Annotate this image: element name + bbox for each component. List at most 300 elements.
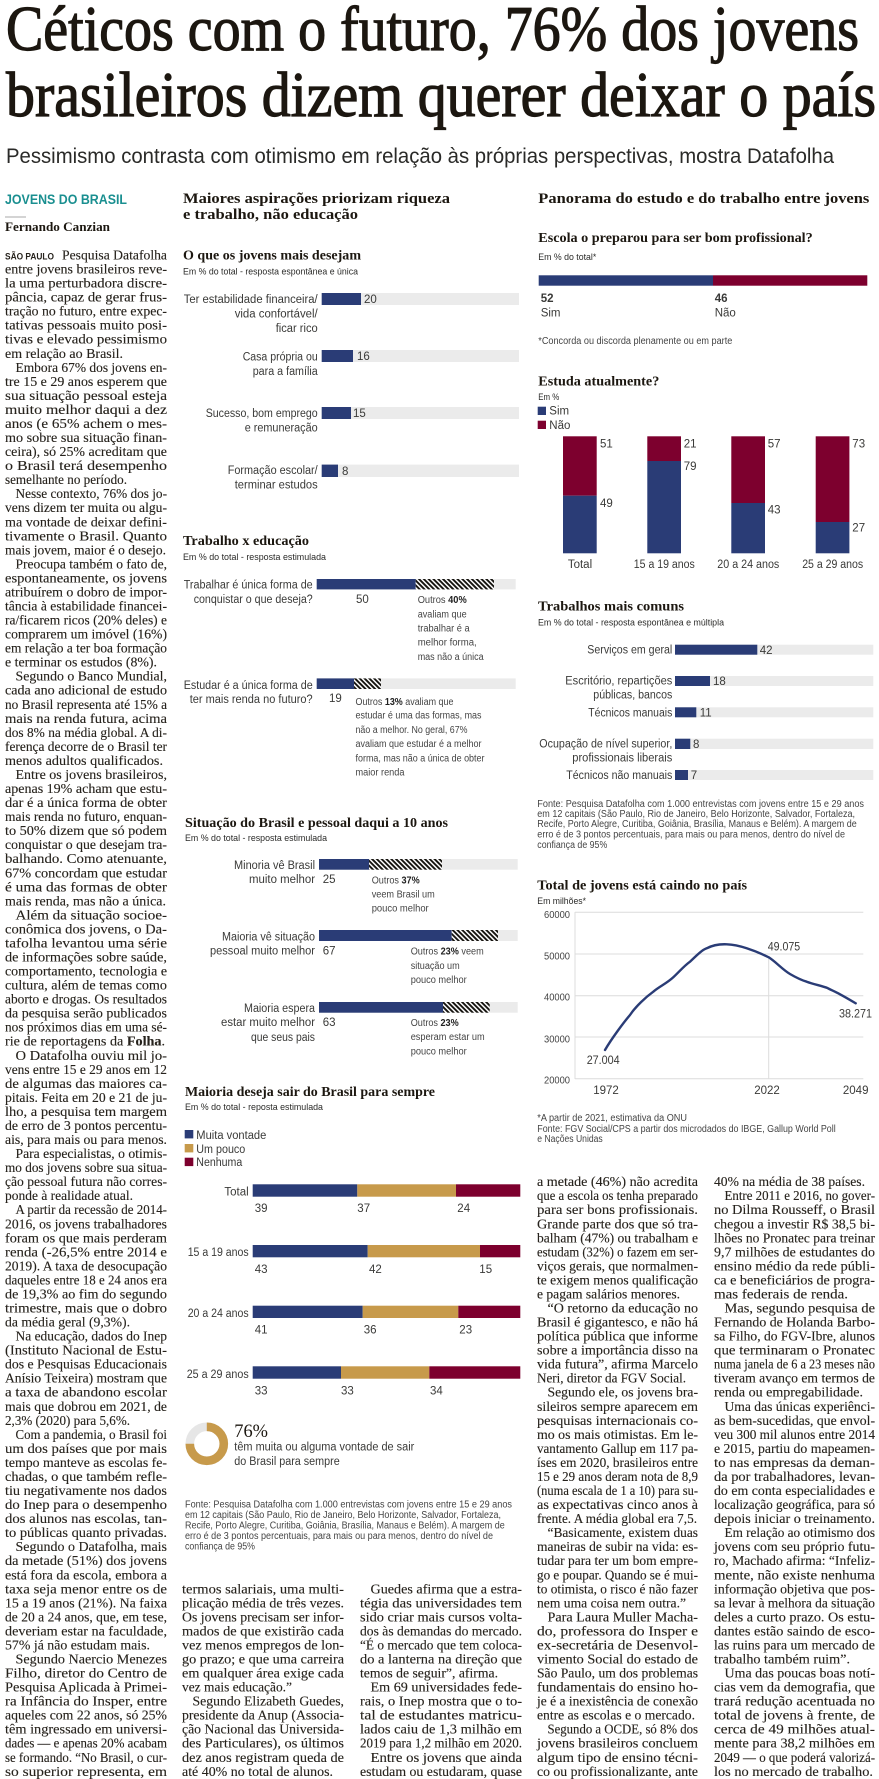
- stacked bar chart: Maioria deseja sair do Brasil: Maioria deseja sair do Brasil para sempre: [185, 1084, 435, 1099]
- bar chart: Trabalhos mais comuns: 18: [713, 676, 726, 688]
- article text column 1: em relação ao Brasil.: [5, 347, 123, 362]
- article text column 5: cias vem da demografia, que: [714, 1681, 875, 1696]
- article text column 1: sua situação pessoal esteja: [5, 389, 168, 404]
- article text column 4: to otimista, o risco é não fazer: [537, 1582, 698, 1597]
- article text column 4: (numa escala de 1 a 10) para su-: [537, 1484, 698, 1499]
- subtitle: Pessimismo contrasta com otimismo em relação às próprias perspectivas, mostra Datafolha: [6, 145, 834, 168]
- article text column 5: dantes estão saindo de esco-: [714, 1624, 875, 1639]
- line chart: Total de jovens está caindo: 1972: [593, 1085, 619, 1097]
- article text column 1: deveriam estar na faculdade,: [5, 1624, 167, 1639]
- bar chart: Trabalhos mais comuns: 8: [693, 739, 699, 751]
- article text column 1: dades — e apenas 20% acabam: [5, 1737, 167, 1752]
- article text column 5: Mas, segundo pesquisa de: [724, 1302, 875, 1316]
- article text column 2: vez menos empregos de lon-: [182, 1638, 344, 1654]
- bar chart: Trabalho x educação: Em % do total - resposta estimulada: [183, 552, 327, 563]
- article text column 1: ma vontade de deixar defini-: [5, 515, 167, 530]
- bar chart: O que os jovens mais desejam: O que os jovens mais desejam: [183, 248, 362, 262]
- article text column 5: ensino médio da rede públi-: [714, 1259, 875, 1274]
- article text column 1: A partir da recessão de 2014-: [16, 1203, 167, 1218]
- article text column 4: sobre a importância disso na: [537, 1344, 699, 1359]
- article text column 1: aborto e drogas. Os resultados: [5, 993, 167, 1008]
- line chart: Total de jovens está caindo: 40000: [544, 993, 570, 1004]
- article text column 1: anos (e 65% achem o mes-: [5, 417, 167, 432]
- bar chart: Escola o preparou: Sim: [541, 307, 561, 319]
- heading: Maiores aspirações: e trabalho, não educação: [183, 207, 358, 223]
- stacked bar chart: Maioria deseja sair do Brasil: 34: [430, 1385, 443, 1397]
- callout: 76% donut: 76%: [234, 1421, 268, 1442]
- article text column 3: rais, o Inep mostra que o to-: [360, 1695, 522, 1710]
- bar chart: Escola o preparou: *Concorda ou discorda plenamente ou em parte: [538, 336, 733, 347]
- source note: left chart: Recife, Porto Alegre, Curitiba, Goiânia, Brasília, Manaus e Belém). A margem de: [185, 1520, 505, 1532]
- article text column 4: Neri, diretor da FGV Social.: [537, 1372, 686, 1387]
- source note: left chart: erro é de 3 pontos percentuais, para mais ou para menos, dentro do nível de: [185, 1531, 493, 1542]
- article text column 5: cerca de 49 milhões atual-: [714, 1723, 875, 1738]
- article text column 5: total de jovens à frente, de: [714, 1709, 875, 1724]
- article text column 4: Segundo ele, os jovens bra-: [548, 1386, 698, 1401]
- article text column 1: tração no futuro, entre expec-: [5, 305, 167, 320]
- bar chart: Trabalho x educação: Estudar é a única forma de: [184, 680, 313, 692]
- bar chart: Trabalho x educação: avaliam que: [418, 610, 467, 620]
- article text column 1: la uma perturbadora discre-: [5, 277, 167, 292]
- bar chart: Trabalho x educação: Trabalho x educação: [183, 533, 309, 548]
- article text column 1: (Instituto Nacional de Estu-: [5, 1344, 167, 1359]
- article text column 5: do em conta especialidades e: [714, 1484, 875, 1499]
- article text column 5: 9,7 milhões de estudantes do: [714, 1245, 875, 1260]
- article text column 1: conômica dos jovens, o Da-: [5, 922, 167, 937]
- bar chart: Situação do Brasil e pessoal: Situação do Brasil e pessoal daqui a 10 anos: [185, 815, 448, 830]
- line chart: Total de jovens está caindo: [537, 878, 872, 1097]
- article text column 1: mais jovem, maior é o desejo.: [5, 543, 166, 558]
- legend: Muita vontade: [196, 1130, 266, 1142]
- article text column 1: Para especialistas, o otimis-: [16, 1147, 167, 1162]
- article text column 1: Segundo Naercio Menezes: [16, 1652, 167, 1668]
- article text column 1: Com a pandemia, o Brasil foi: [16, 1428, 167, 1443]
- article text column 3: sido criar mais cursos volta-: [360, 1610, 522, 1625]
- legend: Sim: [549, 406, 569, 418]
- bar chart: Trabalho x educação: maior renda: [356, 768, 405, 778]
- article text column 3: temos de seguir”, afirma.: [360, 1666, 498, 1682]
- article text column 5: renda ou empregabilidade.: [714, 1386, 863, 1401]
- callout: 76% donut: do Brasil para sempre: [234, 1456, 340, 1468]
- source note: right chart: erro é de 3 pontos percentuais, para mais ou para menos, dentro do nível de: [537, 830, 845, 840]
- bar chart: Situação do Brasil e pessoal: veem Brasil um: [372, 890, 435, 900]
- bar chart: Escola o preparou: [538, 230, 867, 347]
- bar chart: O que os jovens mais desejam: Casa própria ou: [243, 352, 318, 364]
- bar chart: Trabalho x educação: Outros 13% avaliam que: [356, 697, 454, 708]
- article text column 1: ção pessoal futura não corres-: [5, 1175, 167, 1190]
- article text column 4: do, professora do Insper e: [537, 1624, 698, 1639]
- article text column 5: ro, Machado afirma: “Infeliz-: [714, 1554, 875, 1569]
- stacked column chart: Estuda atualmente: 27: [852, 522, 865, 534]
- article text column 1: pitais. Feita em 20 e 21 de ju-: [5, 1091, 167, 1106]
- stacked bar chart: Maioria deseja sair do Brasil: 33: [341, 1385, 354, 1397]
- article text column 5: jovens com seu próprio futu-: [713, 1540, 875, 1555]
- article text column 1: entre jovens brasileiros reve-: [5, 262, 167, 278]
- bar chart: Trabalhos mais comuns: Escritório, repartições: [565, 676, 673, 688]
- stacked bar chart: Maioria deseja sair do Brasil: 15: [479, 1264, 492, 1276]
- bar chart: Trabalho x educação: melhor forma,: [418, 638, 477, 648]
- article text column 1: tativas pessoais muito posi-: [5, 319, 167, 334]
- article text column 4: e pagam salários menores.: [537, 1288, 680, 1302]
- stacked bar chart: Maioria deseja sair do Brasil: 33: [255, 1385, 267, 1397]
- article text column 2: [182, 1582, 345, 1779]
- article text column 4: Brasil é gigantesco, e não há: [537, 1316, 699, 1330]
- article text column 1: mais renda no futuro, enquan-: [5, 810, 167, 825]
- article text column 1: de erro de 3 pontos percentu-: [5, 1119, 167, 1134]
- article text column 1: Segundo o Banco Mundial,: [16, 670, 167, 685]
- article text column 1: SÃO PAULO: [5, 252, 54, 262]
- article text column 4: algum tipo de ensino técni-: [537, 1751, 698, 1766]
- article text column 1: tivas e elevado pessimismo: [5, 333, 167, 348]
- article text column 4: São Paulo, um dos problemas: [537, 1666, 698, 1682]
- line chart: Total de jovens está caindo: 2049: [843, 1085, 868, 1097]
- stacked bar chart: Maioria deseja sair do Brasil: 36: [364, 1325, 376, 1337]
- bar chart: Situação do Brasil e pessoal: pouco melhor: [411, 975, 467, 986]
- article text column 1: comprarem um imóvel (16%): [5, 628, 167, 643]
- source note: left chart: confiança de 95%: [185, 1542, 255, 1552]
- article text column 4: política pública que informe: [537, 1330, 698, 1345]
- article text column 2: mados de que existirão cada: [182, 1624, 345, 1639]
- line chart: Total de jovens está caindo: 38.271: [839, 1008, 872, 1020]
- article text column 3: Em 69 universidades fede-: [370, 1681, 522, 1696]
- article text column 1: 15 a 19 anos (21%). Na faixa: [5, 1596, 168, 1611]
- bar chart: Trabalhos mais comuns: 11: [700, 708, 712, 720]
- bar chart: Trabalhos mais comuns: Serviços em geral: [587, 645, 672, 657]
- heading: Maiores aspirações: [183, 191, 451, 223]
- article text column 1: Além da situação socioe-: [16, 908, 167, 923]
- article text column 1: Entre os jovens brasileiros,: [16, 768, 167, 783]
- source note: left chart: em 12 capitais (São Paulo, Rio de Janeiro, Belo Horizonte, Salvador, Fortaleza,: [185, 1510, 501, 1521]
- article text column 1: tempo manteve as escolas fe-: [5, 1456, 167, 1471]
- bar chart: Escola o preparou: 46: [715, 293, 727, 305]
- article text column 5: no Dilma Rousseff, o Brasil: [714, 1203, 875, 1218]
- article text column 2: Os jovens precisam ser infor-: [182, 1610, 344, 1625]
- bar chart: Trabalho x educação: Outros 40%: [418, 595, 467, 606]
- stacked column chart: Estuda atualmente: 25 a 29 anos: [802, 559, 863, 571]
- article text column 1: Pesquisa Aplicada à Primei-: [5, 1681, 167, 1696]
- bar chart: Situação do Brasil e pessoal: que seus pais: [251, 1032, 315, 1044]
- article text column 3: tégia das universidades tem: [360, 1596, 522, 1611]
- article text column 4: nem uma coisa nem outra.”: [537, 1596, 686, 1611]
- article text column 1: mais na renda futura, acima: [5, 712, 168, 727]
- article text column 4: tudar para ter um bom empre-: [537, 1554, 698, 1569]
- article text column 2: go prazo; e que uma carreira: [182, 1652, 345, 1668]
- bar chart: O que os jovens mais desejam: Ter estabilidade financeira/: [184, 294, 318, 306]
- article text column 1: apenas 19% acham que estu-: [5, 782, 167, 797]
- article text column 3: do a lanterna na direção que: [360, 1652, 522, 1668]
- article text column 1: aqueles com 22 anos, só 25%: [5, 1709, 167, 1724]
- article text column 5: que terminaram o Pronatec: [714, 1344, 875, 1359]
- bar chart: Trabalho x educação: 50: [356, 594, 369, 606]
- article text column 1: comportamento, tecnologia e: [5, 964, 167, 980]
- bar chart: Trabalhos mais comuns: 7: [691, 770, 697, 782]
- legend: Nenhuma: [196, 1157, 243, 1169]
- article text column 5: ca e beneficiários de progra-: [714, 1273, 875, 1288]
- bar chart: Situação do Brasil e pessoal: situação um: [411, 961, 460, 972]
- bar chart: Situação do Brasil e pessoal: [185, 815, 518, 1058]
- article text column 1: o Brasil terá desempenho: [5, 459, 167, 474]
- article text column 5: da por trabalhadores, levan-: [714, 1470, 875, 1485]
- article text column 1: 2019). A taxa de desocupação: [5, 1259, 167, 1274]
- article text column 5: veu 300 mil alunos entre 2014: [714, 1428, 875, 1443]
- bar chart: Situação do Brasil e pessoal: Outros 23%: [411, 1018, 459, 1029]
- article text column 1: Nesse contexto, 76% dos jo-: [16, 487, 167, 502]
- article text column 1: têm ingressado em universi-: [5, 1723, 167, 1738]
- article text column 1: tafolha levantou uma série: [5, 936, 167, 952]
- bar chart: Trabalho x educação: ter mais renda no futuro?: [190, 694, 313, 706]
- line chart: Total de jovens está caindo: 2022: [754, 1085, 780, 1097]
- article text column 1: vens entre 15 e 29 anos em 12: [5, 1063, 167, 1078]
- bar chart: Trabalho x educação: avaliam que estudar é a melhor: [356, 739, 482, 750]
- article text column 3: “É o mercado que tem coloca-: [360, 1636, 522, 1654]
- bar chart: O que os jovens mais desejam: 16: [357, 351, 370, 363]
- bar chart: Escola o preparou: 52: [541, 293, 553, 305]
- article text column 1: semelhante no período.: [5, 473, 127, 488]
- stacked bar chart: Maioria deseja sair do Brasil: Total: [224, 1187, 249, 1199]
- bar chart: O que os jovens mais desejam: Formação escolar/: [228, 465, 318, 477]
- article text column 2: plicação média de três vezes.: [182, 1596, 344, 1611]
- bar chart: Situação do Brasil e pessoal: muito melhor: [249, 874, 315, 886]
- bar chart: O que os jovens mais desejam: e remuneração: [245, 423, 318, 435]
- line chart: Total de jovens está caindo: 20000: [544, 1075, 570, 1086]
- article text column 4: te exigem menos qualificação: [537, 1273, 698, 1288]
- bar chart: Situação do Brasil e pessoal: 67: [323, 946, 335, 958]
- article text column 1: da média geral (9,3%).: [5, 1316, 130, 1330]
- article text column 1: Filho, diretor do Centro de: [5, 1666, 167, 1682]
- article text column 5: chegou a investir R$ 38,5 bi-: [714, 1217, 875, 1232]
- bar chart: Situação do Brasil e pessoal: esperam estar um: [411, 1032, 485, 1043]
- stacked bar chart: Maioria deseja sair do Brasil: 23: [459, 1325, 472, 1337]
- bar chart: Trabalhos mais comuns: Técnicos manuais: [588, 707, 673, 719]
- article text column 5: e 2015, partiu do mapeamen-: [714, 1442, 875, 1457]
- article text column 1: de 20 a 24 anos, que, em tese,: [5, 1610, 167, 1625]
- source note: left chart: [185, 1500, 512, 1552]
- article text column 1: 2016, os jovens trabalhadores: [5, 1217, 167, 1232]
- article text column 4: je é a inexistência de conexão: [536, 1695, 698, 1710]
- article text column 1: Segundo o Datafolha, mais: [16, 1540, 167, 1555]
- article text column 1: e terminar os estudos (8%).: [5, 656, 157, 671]
- article text column 1: da pesquisa serão publicados: [5, 1007, 167, 1022]
- article text column 3: lados caiu de 1,3 milhão em: [360, 1723, 522, 1738]
- article text column 1: 67% concordam que estudar: [5, 866, 167, 881]
- article text column 1: cada ano adicional de estudo: [5, 684, 167, 699]
- bar chart: Trabalho x educação: não a melhor. No geral, 67%: [356, 725, 468, 736]
- bar chart: Trabalhos mais comuns: Trabalhos mais comuns: [538, 599, 684, 614]
- stacked bar chart: Maioria deseja sair do Brasil: 42: [369, 1264, 382, 1276]
- bar chart: Trabalhos mais comuns: 42: [760, 645, 772, 657]
- stacked column chart: Estuda atualmente: [538, 373, 865, 571]
- stacked column chart: Estuda atualmente: 20 a 24 anos: [717, 559, 780, 571]
- article text column 4: [536, 1175, 699, 1779]
- stacked column chart: Estuda atualmente: Total: [568, 559, 592, 571]
- stacked column chart: Estuda atualmente: 49: [600, 498, 613, 510]
- bar chart: Situação do Brasil e pessoal: 25: [323, 874, 335, 886]
- article text column 1: Preocupa também o fato de,: [16, 557, 167, 572]
- stacked column chart: Estuda atualmente: 21: [684, 438, 696, 450]
- article text column 1: Embora 67% dos jovens en-: [16, 361, 167, 376]
- line chart: Total de jovens está caindo: Em milhões*: [537, 896, 586, 907]
- bar chart: Situação do Brasil e pessoal: pouco melhor: [411, 1046, 467, 1058]
- article text column 1: no Brasil representa até 15% a: [5, 698, 168, 713]
- article text column 4: Segundo a OCDE, só 8% dos: [548, 1723, 698, 1738]
- stacked bar chart: Maioria deseja sair do Brasil: 24: [457, 1203, 471, 1215]
- legend: [538, 406, 570, 432]
- line chart: Total de jovens está caindo: Total de jovens está caindo no país: [537, 878, 747, 893]
- article text column 4: frente. A média global era 7,5.: [537, 1512, 697, 1527]
- article text column 4: Grande parte dos que só tra-: [537, 1217, 698, 1232]
- article text column 1: de 19,3% ao fim do segundo: [5, 1288, 167, 1302]
- article text column 1: nos próximos dias em uma sé-: [5, 1021, 167, 1036]
- bar chart: Trabalho x educação: estudar é uma das formas, mas: [356, 710, 482, 722]
- article text column 1: espontaneamente, os jovens: [5, 571, 167, 586]
- article text column 1: taxa seja menor entre os de: [5, 1582, 167, 1597]
- source note: line chart: e Nações Unidas: [537, 1134, 603, 1145]
- article text column 5: Fernando de Holanda Barbo-: [714, 1316, 875, 1330]
- article text column 2: des Particulares), os últimos: [182, 1737, 344, 1752]
- stacked column chart: Estuda atualmente: 57: [768, 438, 780, 450]
- article text column 5: [713, 1175, 876, 1779]
- source note: line chart: Fonte: FGV Social/CPS a partir dos microdados do IBGE, Gallup World Poll: [537, 1124, 836, 1135]
- article text column 4: vimento Social do estado de: [537, 1652, 698, 1668]
- article text column 4: balham (47%) ou trabalham e: [537, 1231, 698, 1246]
- line chart: Total de jovens está caindo: 50000: [544, 952, 570, 962]
- article text column 5: lhões no Pronatec para treinar: [714, 1231, 875, 1246]
- bar chart: Trabalhos mais comuns: [538, 599, 873, 782]
- stacked column chart: Estuda atualmente: 79: [684, 461, 696, 473]
- bar chart: Trabalho x educação: conquistar o que deseja?: [194, 594, 313, 606]
- article text column 1: tivamente o Brasil. Quanto: [5, 529, 167, 544]
- article text column 1: pância, capaz de gerar frus-: [5, 291, 167, 306]
- article text column 1: dos 8% na média global. A di-: [5, 726, 167, 741]
- article text column 1: Na educação, dados do Inep: [16, 1330, 167, 1345]
- bar chart: Trabalhos mais comuns: profissionais liberais: [572, 753, 673, 765]
- article text column 5: tiveram avanço em termos de: [714, 1372, 875, 1387]
- heading: Maiores aspirações: Maiores aspirações priorizam riqueza: [183, 191, 451, 207]
- article text column 1: a taxa de abandono escolar: [5, 1386, 167, 1401]
- article text column 3: 2019 para 1,2 milhão em 2020.: [360, 1737, 522, 1752]
- article text column 1: dos e Pesquisas Educacionais: [5, 1358, 167, 1373]
- article text column 5: deles a curto prazo. Os estu-: [714, 1610, 875, 1625]
- article text column 4: vida futura”, afirma Marcelo: [537, 1358, 698, 1373]
- article text column 2: dez anos registram queda de: [182, 1751, 344, 1766]
- article text column 1: mo dos jovens sobre sua situa-: [5, 1161, 167, 1176]
- bar chart: Situação do Brasil e pessoal: Maioria vê situação: [222, 932, 315, 944]
- article text column 4: 15 e 29 anos deram nota de 8,9: [537, 1470, 698, 1485]
- article text column 4: go e poupar. Quando se é mui-: [537, 1568, 698, 1583]
- article text column 1: balhando. Como atenuante,: [5, 852, 167, 867]
- article text column 1: é uma das formas de obter: [5, 880, 167, 895]
- article text column 1: mais renda, mas não a única.: [5, 894, 166, 909]
- bar chart: Trabalhos mais comuns: Em % do total - resposta espontânea e múltipla: [538, 618, 725, 628]
- bar chart: Trabalhos mais comuns: Ocupação de nível superior,: [539, 739, 672, 751]
- stacked column chart: Estuda atualmente: 43: [768, 505, 780, 517]
- article text column 1: ferença decorre de o Brasil ter: [5, 740, 167, 755]
- bar chart: Trabalho x educação: forma, mas não a única de obter: [356, 754, 485, 764]
- article text column 4: estudam (32%) o fazem em ser-: [537, 1245, 698, 1260]
- bar chart: Trabalho x educação: mas não a única: [418, 652, 484, 663]
- article text column 3: tal de estudantes matricu-: [360, 1709, 522, 1724]
- stacked bar chart: Maioria deseja sair do Brasil: 25 a 29 anos: [187, 1369, 249, 1381]
- article text column 1: foram os que mais perderam: [5, 1231, 167, 1246]
- article text column 4: entre as escolas e o mercado.: [537, 1709, 695, 1724]
- bar chart: Escola o preparou: Em % do total*: [538, 252, 597, 263]
- article text column 1: menos adultos qualificados.: [5, 754, 163, 769]
- article text column 1: tre 15 e 29 anos esperem que: [5, 375, 167, 390]
- article text column 1: Anísio Teixeira) mostram que: [5, 1372, 167, 1387]
- article text column 1: em relação a ter boa formação: [5, 642, 167, 657]
- bar chart: Trabalho x educação: [183, 533, 516, 778]
- bar chart: O que os jovens mais desejam: Em % do total - resposta espontânea e única: [183, 266, 359, 278]
- bar chart: O que os jovens mais desejam: para a família: [253, 366, 318, 378]
- article text column 1: muito melhor daqui a dez: [5, 403, 167, 418]
- article text column 1: cultura, além de temas como: [5, 979, 167, 994]
- article text column 3: Entre os jovens que ainda: [370, 1751, 523, 1766]
- stacked column chart: Estuda atualmente: Estuda atualmente?: [538, 373, 659, 388]
- legend: Não: [549, 420, 570, 432]
- article text column 5: depois iniciar o treinamento.: [714, 1512, 875, 1527]
- article text column 5: 40% na média de 38 países.: [714, 1175, 865, 1190]
- stacked bar chart: Maioria deseja sair do Brasil: 43: [255, 1264, 267, 1276]
- source note: line chart: *A partir de 2021, estimativa da ONU: [537, 1113, 687, 1124]
- article text column 1: do Inep para o desempenho: [5, 1498, 167, 1513]
- article text column 5: las ruins para um mercado de: [714, 1638, 875, 1654]
- article text column 1: tância à estabilidade financei-: [5, 600, 167, 614]
- article text column 5: trará redução acentuada no: [714, 1695, 875, 1710]
- article text column 1: to 50% dizem que só podem: [5, 824, 167, 839]
- article text column 4: a metade (46%) não acredita: [537, 1175, 699, 1190]
- callout: 76% donut: [190, 1421, 414, 1468]
- article text column 1: de algumas das maiores ca-: [5, 1077, 167, 1092]
- source note: left chart: Fonte: Pesquisa Datafolha com 1.000 entrevistas com jovens entre 15 e 29 anos: [185, 1500, 512, 1510]
- bar chart: Escola o preparou: Escola o preparou para ser bom profissional?: [538, 230, 813, 245]
- legend: Um pouco: [196, 1144, 245, 1156]
- bar chart: Situação do Brasil e pessoal: Em % do total - resposta estimulada: [185, 833, 328, 844]
- article text column 4: as expectativas cinco anos à: [537, 1498, 699, 1513]
- article text column 1: chadas, o que também refle-: [5, 1470, 167, 1485]
- bar chart: Situação do Brasil e pessoal: estar muito melhor: [221, 1017, 315, 1029]
- bar chart: Situação do Brasil e pessoal: Outros 37%: [372, 876, 420, 886]
- article text column 5: Uma das poucas boas notí-: [724, 1666, 875, 1682]
- article text column 1: da metade (51%) dos jovens: [5, 1554, 167, 1569]
- article text column 1: Pesquisa Datafolha: [62, 248, 168, 264]
- bar chart: O que os jovens mais desejam: terminar estudos: [235, 480, 318, 492]
- article text column 5: as bem-sucedidas, que envol-: [714, 1414, 875, 1429]
- article text column 1: lho, a pesquisa tem margem: [5, 1105, 167, 1120]
- article text column 2: ção Nacional das Universida-: [182, 1723, 344, 1738]
- article text column 4: maneiras de subir na vida: es-: [537, 1540, 698, 1555]
- line chart: Total de jovens está caindo: 60000: [544, 910, 570, 921]
- article text column 4: pesquisas internacionais co-: [537, 1414, 698, 1429]
- source note: right chart: [537, 799, 864, 851]
- article text column 1: trimestre, mais que o dobro: [5, 1302, 167, 1316]
- article text column 4: ex-secretária de Desenvol-: [537, 1638, 698, 1654]
- line chart: Total de jovens está caindo: 49.075: [768, 941, 800, 953]
- article text column 2: em qualquer área exige cada: [182, 1666, 345, 1682]
- article text column 1: de informações sobre saúde,: [5, 950, 167, 966]
- article text column 5: to nas empresas da deman-: [714, 1456, 875, 1471]
- article text column 1: um dos países que por mais: [5, 1442, 167, 1457]
- article text column 4: que a escola os tenha preparado: [537, 1189, 698, 1204]
- bar chart: Trabalho x educação: trabalhar é a: [418, 624, 470, 634]
- article text column 5: mente, não existe nenhuma: [714, 1568, 876, 1583]
- bar chart: Trabalhos mais comuns: públicas, bancos: [593, 690, 673, 702]
- bar chart: O que os jovens mais desejam: 15: [353, 408, 366, 420]
- legend: [185, 1130, 266, 1169]
- article text column 1: dos alunos nas escolas, tan-: [5, 1512, 167, 1527]
- article text column 3: Guedes afirma que a estra-: [370, 1582, 522, 1597]
- article text column 5: trabalho também ruim”.: [714, 1652, 850, 1668]
- article text column 1: 2,3% (2020) para 5,6%.: [5, 1414, 130, 1429]
